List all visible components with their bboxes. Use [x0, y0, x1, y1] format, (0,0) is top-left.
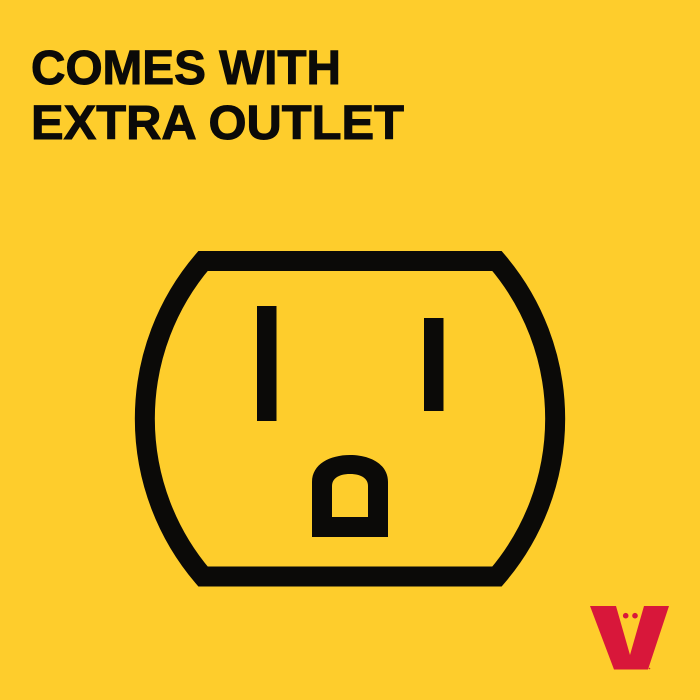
right slot: [424, 318, 444, 411]
title: EXTRA OUTLET: [31, 97, 404, 150]
ground hole: [312, 455, 388, 537]
icon: electrical outlet: [145, 261, 555, 576]
outlet faceplate outline: [145, 261, 555, 576]
logo: red V: [590, 606, 669, 670]
title: [31, 42, 404, 150]
title: COMES WITH: [31, 42, 341, 95]
left slot: [257, 306, 276, 421]
